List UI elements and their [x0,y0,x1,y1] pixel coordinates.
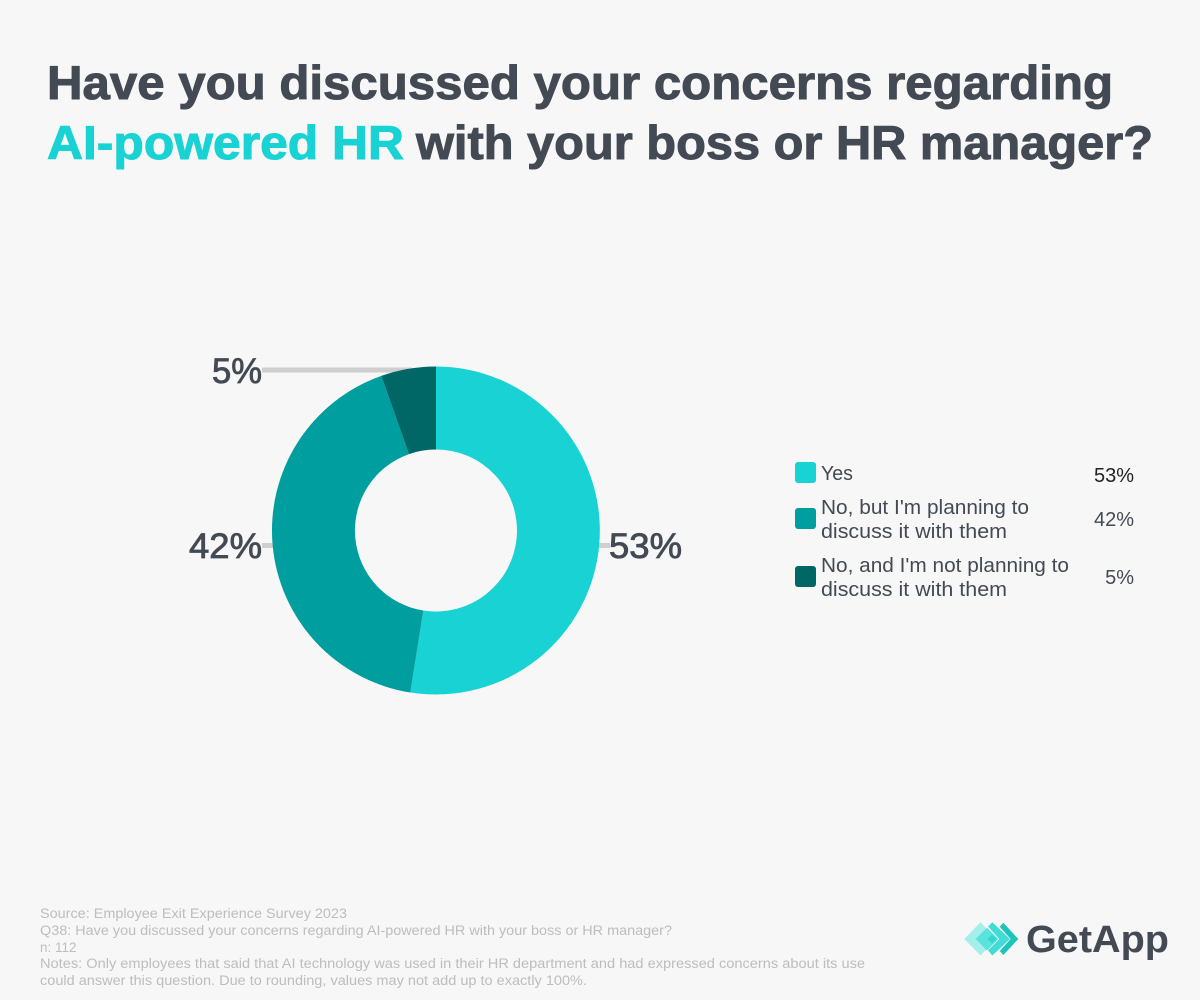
wordmark: GetApp [1026,919,1169,961]
legend item: No, but planning [795,497,1134,543]
title: Have you discussed your concerns regarding [47,56,1113,109]
legend item: Yes: Yes [821,463,853,485]
footnotes: Source: Employee Exit Experience Survey 2023 [40,906,347,921]
donut chart [189,352,682,694]
label: 42%: 42% [189,527,262,566]
title: with your boss or HR manager? [415,116,1153,169]
legend item: No, not planning: discuss it with them [821,579,1007,601]
footnotes: could answer this question. Due to rounding, values may not add up to exactly 100%. [40,973,587,988]
legend item: Yes [795,462,1134,487]
legend item: No, not planning [795,555,1134,601]
segment: No, not planning 5% [381,366,436,454]
leader line: 5% [262,368,412,372]
footnotes [40,906,865,988]
legend item: No, not planning: No, and I'm not planning to [821,555,1069,577]
leader line: 53% [598,543,610,548]
footnotes: Notes: Only employees that said that AI technology was used in their HR department and had expressed concerns about its use [40,956,865,971]
segment: No, planning 42% [272,376,423,692]
logo: GetApp [964,919,1169,961]
segment: Yes 53% [410,366,600,694]
legend [795,462,1134,601]
label: 5%: 5% [212,352,262,391]
legend item: Yes: 53% [1094,465,1134,487]
icon: layered diamonds and chevrons [964,922,1018,956]
footnotes: n: 112 [40,940,77,955]
legend item: No, not planning: 5% [1105,567,1134,589]
legend item: No, but planning: 42% [1094,509,1134,531]
label: 53%: 53% [609,527,682,566]
legend item: No, but planning: discuss it with them [821,521,1007,543]
leader line: 42% [262,543,274,548]
title: AI-powered HR [47,116,404,169]
title [47,56,1153,169]
legend item: No, but planning: No, but I'm planning to [821,497,1029,519]
footnotes: Q38: Have you discussed your concerns regarding AI-powered HR with your boss or HR manager? [40,923,672,938]
